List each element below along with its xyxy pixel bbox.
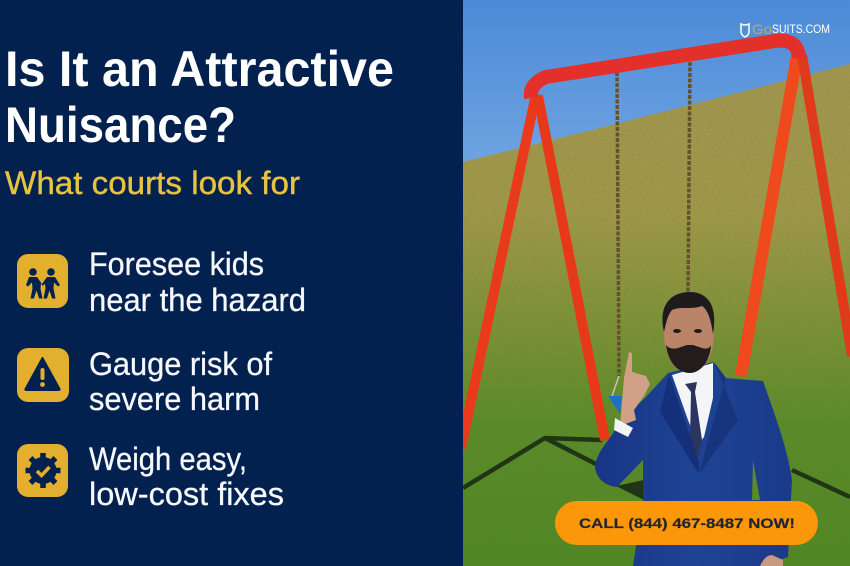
raised hand [620,352,650,426]
swing shadow [463,438,850,497]
text: gauge risk of severe harm [89,346,272,417]
criterion: gauge risk [17,346,272,417]
shirt [672,363,713,445]
tie [685,382,702,458]
sky [463,0,850,170]
call to action button: CALL (844) 467-8487 NOW! [579,515,795,531]
grass hill [463,64,850,566]
grass texture [463,60,850,566]
text: weigh easy low-cost fixes: low-cost fixes [89,476,284,512]
title: Is It an Attractive [5,41,394,97]
seat hanger [612,376,619,396]
panel: swing photo illustration [461,0,850,566]
text: gauge risk of severe harm: severe harm [89,381,260,417]
text: foresee kids near the hazard: Foresee kids [89,246,264,282]
text: foresee kids near the hazard [89,246,306,318]
panel: navy text panel [0,0,463,566]
logo: Go [752,21,772,37]
hand at lower right [760,555,783,566]
logo [741,21,830,37]
arm shadow on grass [616,480,644,500]
icon: warning triangle [17,348,69,402]
text: weigh easy low-cost fixes [89,441,284,512]
criterion: foresee kids [17,246,306,318]
title [5,41,394,153]
lawyer figure [595,292,792,566]
logo: SUITS.COM [772,22,830,36]
swing frame [461,41,850,448]
text: foresee kids near the hazard: near the hazard [89,282,306,318]
call to action button [555,501,818,545]
shirt cuff [614,418,633,437]
text: gauge risk of severe harm: Gauge risk of [89,346,272,382]
beard [666,345,711,373]
swing chains [617,62,690,376]
suit jacket [595,362,792,566]
eyes [673,329,702,333]
icon: two children [17,254,68,308]
icon: gear with check [17,444,68,497]
lapels [660,374,699,474]
text: weigh easy low-cost fixes: Weigh easy, [89,441,247,477]
gap between arm and body [752,460,760,500]
title: Nuisance? [5,97,236,153]
subtitle: What courts look for [5,165,300,201]
criterion: weigh fixes [17,441,284,512]
neck and face [664,306,714,368]
hair [662,292,714,334]
blue swing seat [608,396,622,414]
